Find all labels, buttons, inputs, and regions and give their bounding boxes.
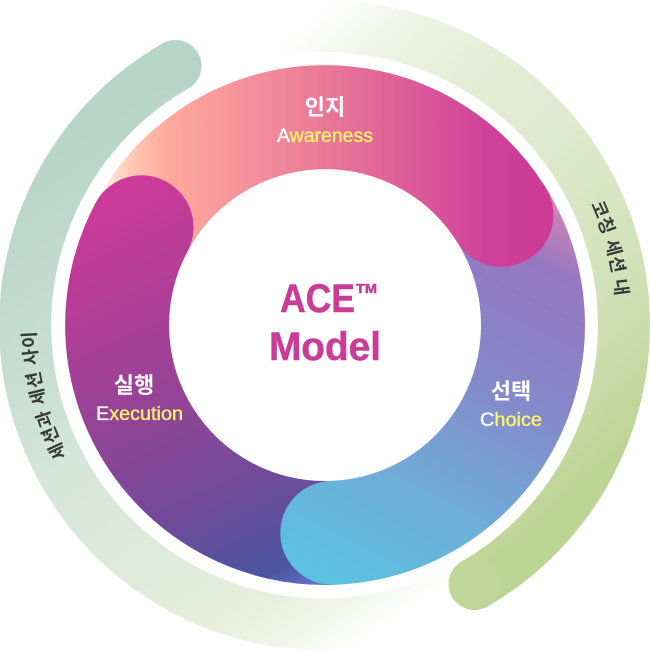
label: choice [480, 379, 542, 431]
label: awareness: Awareness [277, 126, 373, 147]
center title: ACE [280, 277, 355, 321]
label: execution [96, 373, 183, 425]
awareness rounded head [449, 163, 553, 267]
label: awareness: 인지 [305, 95, 345, 120]
label: choice: 선택 [491, 379, 531, 404]
ring segment: execution [90, 175, 332, 533]
center title: Model [269, 325, 381, 369]
label: awareness [277, 95, 373, 147]
label: execution: Execution [96, 404, 183, 425]
ring segment: awareness [142, 117, 501, 227]
label: between sessions: 세션과 세션 사이 [20, 333, 64, 458]
ring segment: choice [280, 215, 533, 585]
label: choice: Choice [480, 410, 542, 431]
label: in session: 코칭 세션 내 [592, 201, 630, 295]
label: execution: 실행 [114, 373, 154, 398]
outer arc: between sessions [0, 40, 430, 650]
center title [269, 277, 381, 369]
center title: TM [356, 281, 377, 296]
outer arc: in session [305, 2, 650, 610]
